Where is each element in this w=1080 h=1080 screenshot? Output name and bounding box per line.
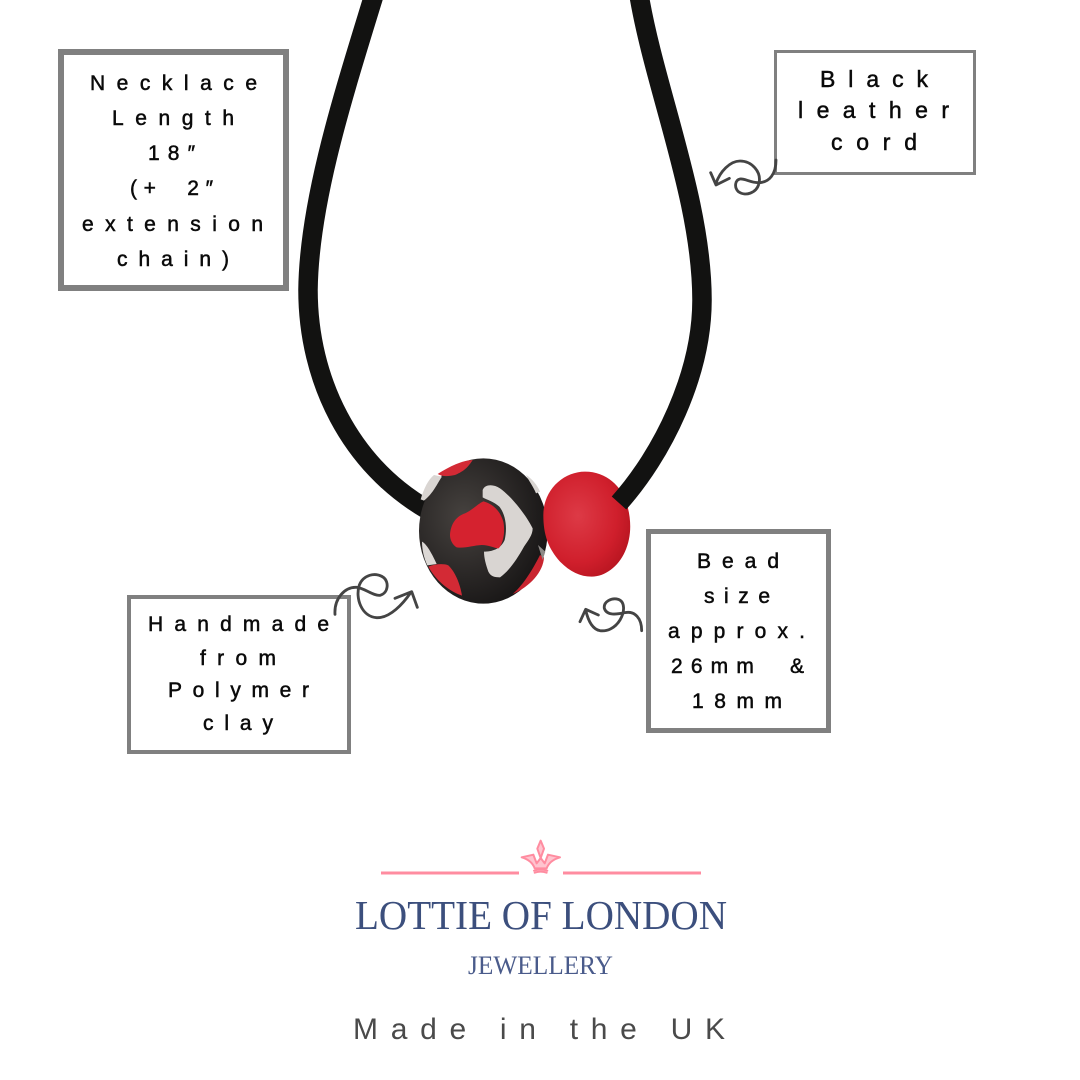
logo subtitle: JEWELLERY bbox=[468, 951, 613, 980]
callout: bead size: size bbox=[704, 585, 770, 608]
callout: bead size: 26mm & bbox=[671, 655, 804, 678]
logo rule right bbox=[563, 872, 701, 874]
callout: necklace length: 18″ bbox=[148, 142, 196, 165]
callout: bead size: approx. bbox=[668, 620, 805, 643]
callout: necklace length: extension bbox=[82, 213, 263, 236]
callout: handmade from polymer clay bbox=[129, 597, 349, 752]
callout: black leather cord: leather bbox=[798, 97, 949, 123]
necklace cord: left strand bbox=[308, 0, 428, 510]
callout: bead size: Bead bbox=[697, 550, 779, 573]
callout: necklace length: (+ 2″ bbox=[130, 177, 214, 200]
logo rule left bbox=[381, 872, 519, 874]
callout: black leather cord: cord bbox=[831, 129, 917, 155]
callout: necklace length: Length bbox=[112, 107, 234, 130]
bead: red bbox=[543, 472, 630, 577]
icon: crown bbox=[522, 841, 560, 873]
callout: handmade from polymer clay: Polymer bbox=[168, 679, 309, 702]
callout: black leather cord: Black bbox=[820, 66, 928, 92]
arrow: to red bead bbox=[580, 599, 642, 631]
tagline: Made in the UK: Made in the UK bbox=[353, 1013, 725, 1046]
logo: Lottie of London Jewellery bbox=[355, 841, 727, 980]
callout: handmade from polymer clay: Handmade bbox=[148, 613, 329, 636]
callout: necklace length: chain) bbox=[117, 248, 229, 271]
callout: necklace length: Necklace bbox=[90, 72, 257, 95]
bead: black patterned bbox=[419, 458, 548, 604]
callout: handmade from polymer clay: clay bbox=[203, 712, 274, 735]
necklace cord: right strand bbox=[619, 0, 702, 503]
logo name: LOTTIE OF LONDON bbox=[355, 892, 727, 938]
arrow: to black bead bbox=[335, 575, 417, 618]
arrow: to cord bbox=[711, 160, 776, 194]
callout: bead size: 18mm bbox=[692, 690, 782, 713]
callout: handmade from polymer clay: from bbox=[200, 647, 276, 670]
callout: black leather cord bbox=[776, 52, 974, 174]
callout: necklace length bbox=[61, 52, 286, 288]
callout: bead size bbox=[648, 532, 828, 730]
